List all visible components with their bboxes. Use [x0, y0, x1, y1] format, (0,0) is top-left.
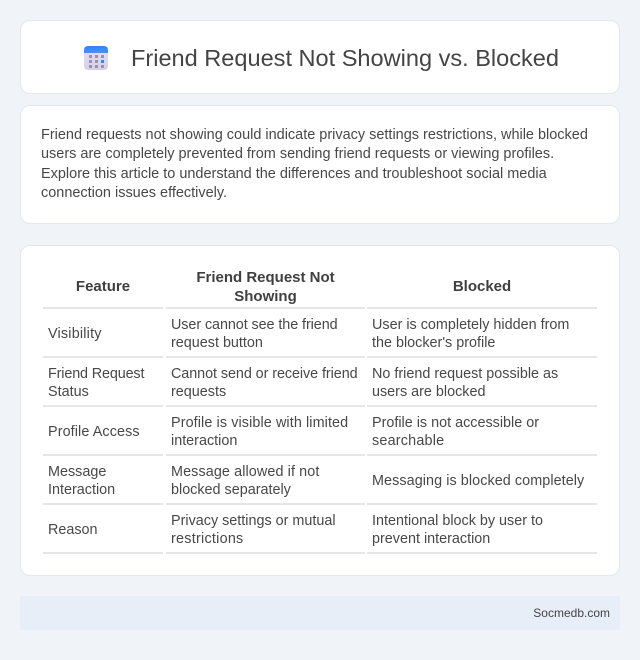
comparison table: restrictions: [171, 531, 244, 547]
comparison table: Cannot send or receive friend: [171, 366, 358, 382]
comparison table: Friend Request Not: [196, 269, 335, 286]
comparison table: No friend request possible as: [372, 366, 558, 382]
comparison table: Interaction: [48, 482, 115, 498]
comparison table: Status: [48, 384, 89, 400]
footer text: Socmedb.com: [533, 606, 610, 620]
comparison table: Showing: [234, 288, 297, 305]
comparison table: User is completely hidden from: [372, 317, 569, 333]
icon: calendar: [84, 46, 108, 70]
comparison table: User cannot see the friend: [171, 317, 338, 333]
text: Friend requests not showing could indicate privacy settings restrictions, while blocked: [41, 127, 588, 143]
text: Explore this article to understand the differences and troubleshoot social media: [41, 166, 547, 182]
text: connection issues effectively.: [41, 185, 227, 201]
comparison table: requests: [171, 384, 226, 400]
comparison table: Friend Request: [48, 366, 144, 382]
comparison table: request button: [171, 335, 263, 351]
comparison table: Visibility: [48, 326, 102, 342]
comparison table: Blocked: [453, 278, 511, 295]
comparison table: blocked separately: [171, 482, 291, 498]
panel: intro card: [20, 105, 620, 224]
comparison table: interaction: [171, 433, 237, 449]
comparison table: Privacy settings or mutual: [171, 513, 336, 529]
title: Friend Request Not Showing vs. Blocked: [131, 45, 559, 71]
comparison table: Message allowed if not: [171, 464, 319, 480]
comparison table: Intentional block by user to: [372, 513, 543, 529]
comparison table: the blocker's profile: [372, 335, 495, 351]
comparison table: Profile is not accessible or: [372, 415, 539, 431]
comparison table: Message: [48, 464, 106, 480]
comparison table: Feature: [76, 278, 130, 295]
text: users are completely prevented from sending friend requests or viewing profiles.: [41, 146, 554, 162]
comparison table: Messaging is blocked completely: [372, 473, 584, 489]
comparison table: Profile is visible with limited: [171, 415, 348, 431]
intro text: [41, 127, 588, 201]
panel: comparison table card: [20, 245, 620, 576]
comparison table: Reason: [48, 522, 98, 538]
footer bar: [20, 596, 620, 630]
panel: title card: [20, 20, 620, 94]
comparison table: [43, 269, 597, 554]
comparison table: prevent interaction: [372, 531, 490, 547]
comparison table: Profile Access: [48, 424, 140, 440]
comparison table: searchable: [372, 433, 444, 449]
comparison table: users are blocked: [372, 384, 485, 400]
